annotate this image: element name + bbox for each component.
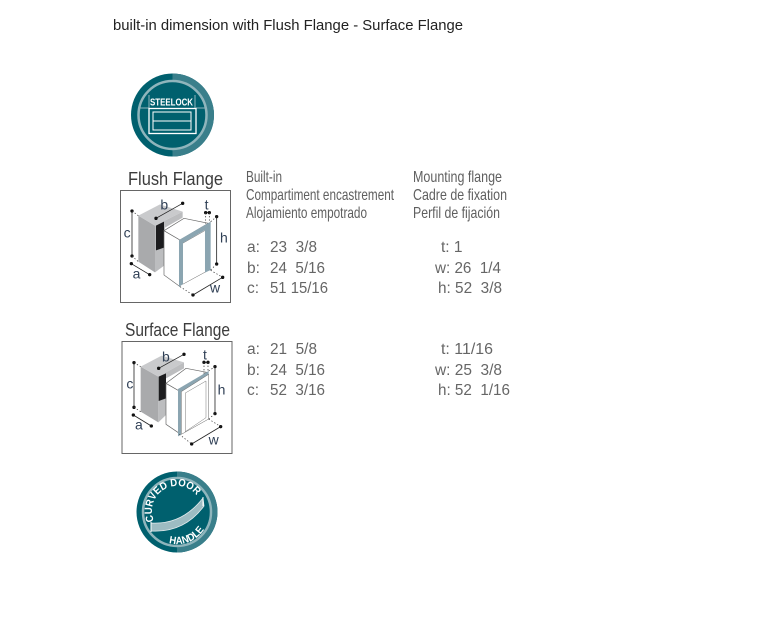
text block: flush flange mounting labels: Mounting flange	[413, 169, 502, 186]
text block: flush flange built-in values: c:	[247, 280, 259, 297]
text block: surface flange built-in values: 52 3/16	[270, 382, 325, 399]
icon: curved door handle badge: HANDLE	[170, 526, 204, 544]
text block: surface flange mounting values: w: 25 3/8	[434, 362, 502, 379]
diagram: surface flange	[122, 342, 232, 454]
diagram: flush flange: c	[124, 224, 131, 240]
text block: flush flange built-in labels: Compartiment encastrement	[246, 187, 394, 204]
text block: flush flange built-in values: 51 15/16	[270, 280, 328, 297]
diagram: surface flange: t	[203, 346, 207, 362]
text block: surface flange built-in values: b:	[247, 362, 260, 379]
diagram: flush flange: t	[205, 196, 209, 212]
text block: flush flange mounting values	[434, 239, 502, 297]
text block: flush flange mounting values: t: 1	[441, 239, 463, 256]
text block: surface flange built-in values: 24 5/16	[270, 362, 325, 379]
text block: flush flange mounting values: w: 26 1/4	[434, 260, 501, 277]
text block: flush flange built-in labels: Alojamiento empotrado	[246, 205, 367, 222]
diagram: surface flange: w	[208, 431, 220, 447]
text block: flush flange built-in values	[247, 239, 328, 297]
diagram: flush flange: b	[160, 197, 168, 213]
text block: flush flange mounting values: h: 52 3/8	[438, 280, 502, 297]
text block: flush flange mounting labels: Perfil de fijación	[413, 205, 500, 222]
text block: flush flange built-in values: a:	[247, 239, 260, 256]
text block: surface flange mounting values: t: 11/16	[441, 341, 493, 358]
text block: surface flange mounting values	[434, 341, 510, 399]
text block: surface flange built-in values	[247, 341, 325, 399]
diagram: flush flange: a	[133, 265, 141, 281]
text block: flush flange mounting labels	[413, 169, 507, 222]
text block: flush flange built-in values: b:	[247, 260, 260, 277]
diagram: flush flange: w	[209, 280, 221, 296]
text block: surface flange mounting values: h: 52 1/16	[438, 382, 510, 399]
text block: flush flange built-in labels: Built-in	[246, 169, 282, 186]
text block: surface flange built-in values: c:	[247, 382, 259, 399]
diagram: flush flange	[120, 190, 230, 302]
diagram: flush flange: h	[220, 229, 228, 245]
text block: flush flange mounting labels: Cadre de fixation	[413, 187, 507, 204]
diagram: surface flange: a	[135, 417, 143, 433]
icon: steelock badge: STEELOCK	[150, 96, 193, 108]
diagram: surface flange: c	[126, 375, 133, 391]
title: built-in dimension with Flush Flange - Surface Flange	[113, 17, 463, 34]
diagram: surface flange: b	[162, 349, 170, 365]
diagram: surface flange: h	[218, 381, 225, 397]
heading: Flush Flange: Flush Flange	[128, 168, 223, 189]
icon: curved door handle badge	[136, 472, 218, 552]
text block: flush flange built-in values: 23 3/8	[270, 239, 317, 256]
text block: flush flange built-in values: 24 5/16	[270, 260, 325, 277]
icon: steelock badge	[131, 74, 214, 156]
text block: flush flange built-in labels	[246, 169, 394, 222]
icon: curved door handle badge: CURVED DOOR	[144, 479, 201, 522]
heading: Surface Flange: Surface Flange	[125, 319, 230, 340]
text block: surface flange built-in values: 21 5/8	[270, 341, 317, 358]
text block: surface flange built-in values: a:	[247, 341, 260, 358]
